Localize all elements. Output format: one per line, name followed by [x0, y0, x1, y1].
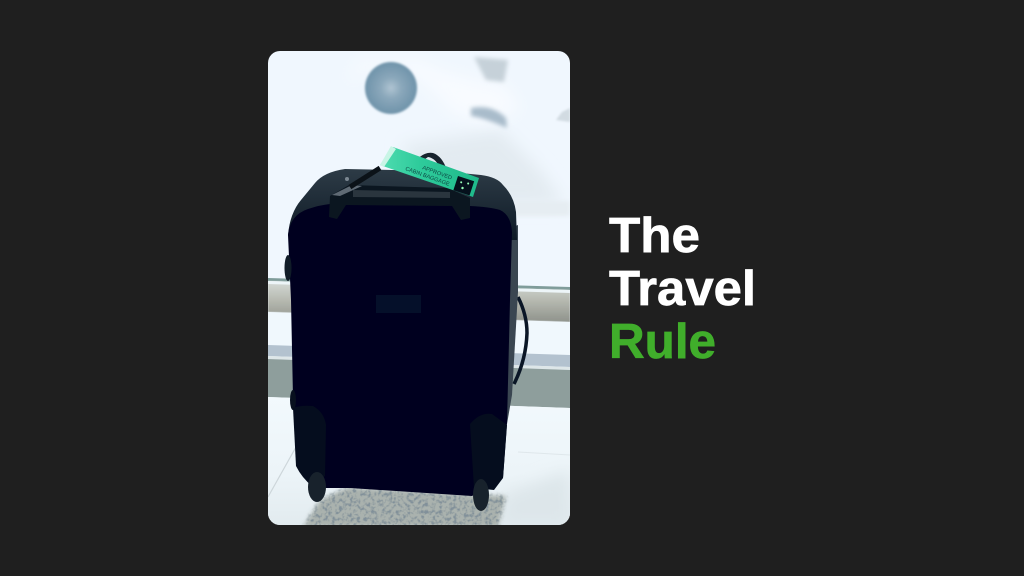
title line: The: The	[609, 209, 700, 263]
tag label: APPROVED	[421, 165, 453, 182]
tag label: CABIN BAGGAGE	[404, 166, 450, 188]
photo background: blurred airport window	[268, 51, 570, 525]
suitcase top lid	[288, 169, 517, 240]
suitcase	[284, 153, 518, 511]
slide canvas	[268, 51, 753, 525]
right wheel	[473, 479, 489, 511]
side strap	[514, 297, 527, 384]
luggage tag	[380, 146, 479, 197]
handle plate	[329, 185, 470, 220]
left wheel	[308, 472, 326, 502]
title line: Travel: Travel	[609, 262, 756, 316]
tag logo	[453, 176, 474, 196]
suitcase main body	[288, 204, 512, 496]
window rail	[268, 278, 570, 408]
panel: suitcase photo	[268, 51, 570, 527]
title	[609, 209, 756, 369]
side pull knob	[284, 255, 292, 281]
left wheel housing	[293, 406, 326, 486]
luggage tag strap	[350, 168, 380, 187]
suitcase side band	[506, 225, 518, 424]
floor	[268, 397, 570, 527]
stone tile	[303, 487, 506, 527]
front pocket patch	[376, 295, 421, 313]
right wheel housing	[470, 414, 507, 490]
title line: Rule: Rule	[609, 315, 716, 369]
